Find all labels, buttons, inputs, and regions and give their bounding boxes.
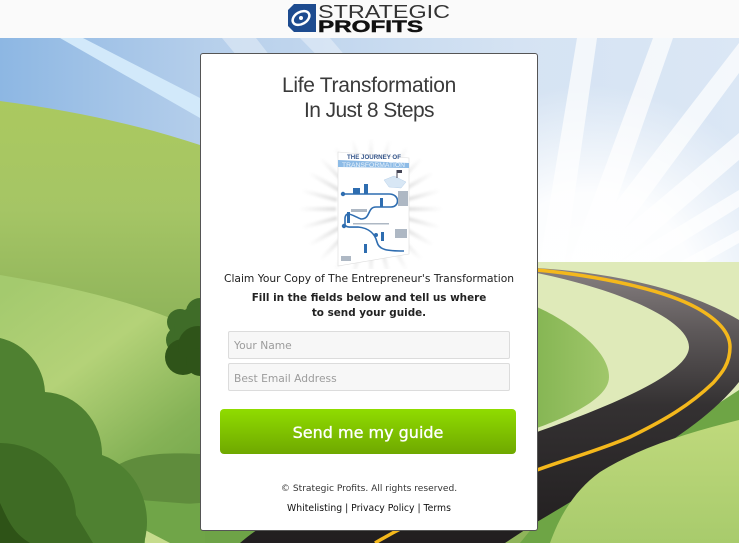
input: email [228,363,510,391]
logo: STRATEGIC [318,2,450,22]
bush: small dark [165,298,222,376]
icon: logo target [288,4,316,32]
header bar [0,0,739,38]
button: Send me my guide [293,423,443,442]
footer links: Whitelisting | Privacy Policy | Terms [287,503,451,514]
input: email: Best Email Address [234,372,337,385]
instruction text: to send your guide. [312,307,426,319]
guide cover image: THE JOURNEY OF [347,155,401,161]
logo: PROFITS [318,17,423,36]
instruction text [252,292,486,319]
input: name: Your Name [234,339,292,352]
input: name [228,331,510,359]
title: Life Transformation [282,74,456,97]
button [220,409,516,454]
panel: signup card [200,53,538,531]
guide cover image: TRANSFORMATION [342,163,405,169]
subheading: Claim Your Copy of The Entrepreneur's Transformation [224,272,514,285]
instruction text: Fill in the fields below and tell us where [252,292,486,304]
guide cover image [310,148,432,269]
title [282,74,456,122]
title: In Just 8 Steps [304,98,434,122]
bush: large left [0,338,147,543]
logo [288,2,450,36]
copyright: © Strategic Profits. All rights reserved. [281,484,457,494]
hedge [118,453,200,504]
